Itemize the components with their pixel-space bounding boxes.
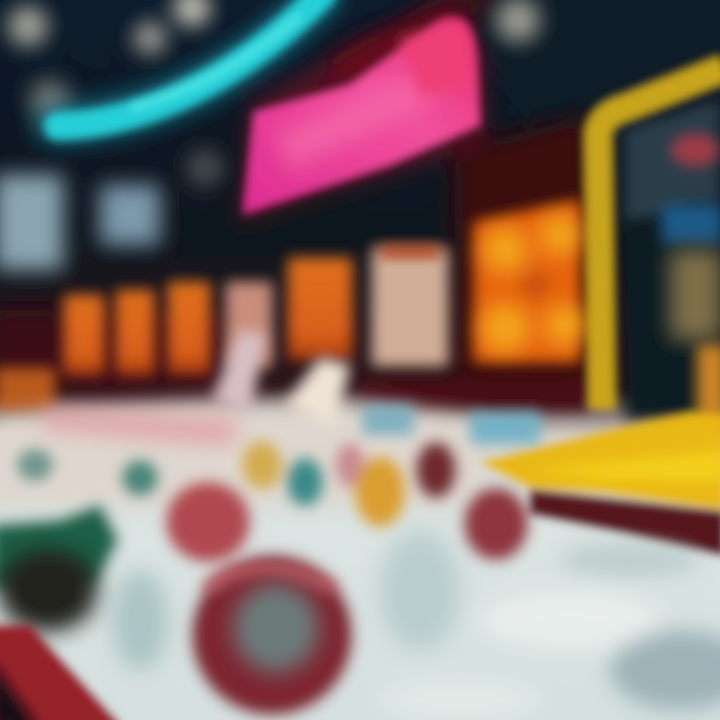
pale counter band [0,330,540,505]
floor mottling [112,530,720,720]
red bowls [166,482,528,562]
yellow frame [598,68,720,410]
yellow counter [480,412,720,510]
large red bowl with grey centre [192,555,352,715]
ceiling lights [8,0,540,186]
green and dark foreground objects [0,505,125,720]
blue-grey left screens [0,175,160,270]
orange game panels [0,200,585,414]
small cups on counter [17,441,456,527]
dark red counter edge [530,490,720,556]
neon cyan arc [55,0,322,126]
pink neon sign [240,10,486,222]
right screen [625,100,720,445]
